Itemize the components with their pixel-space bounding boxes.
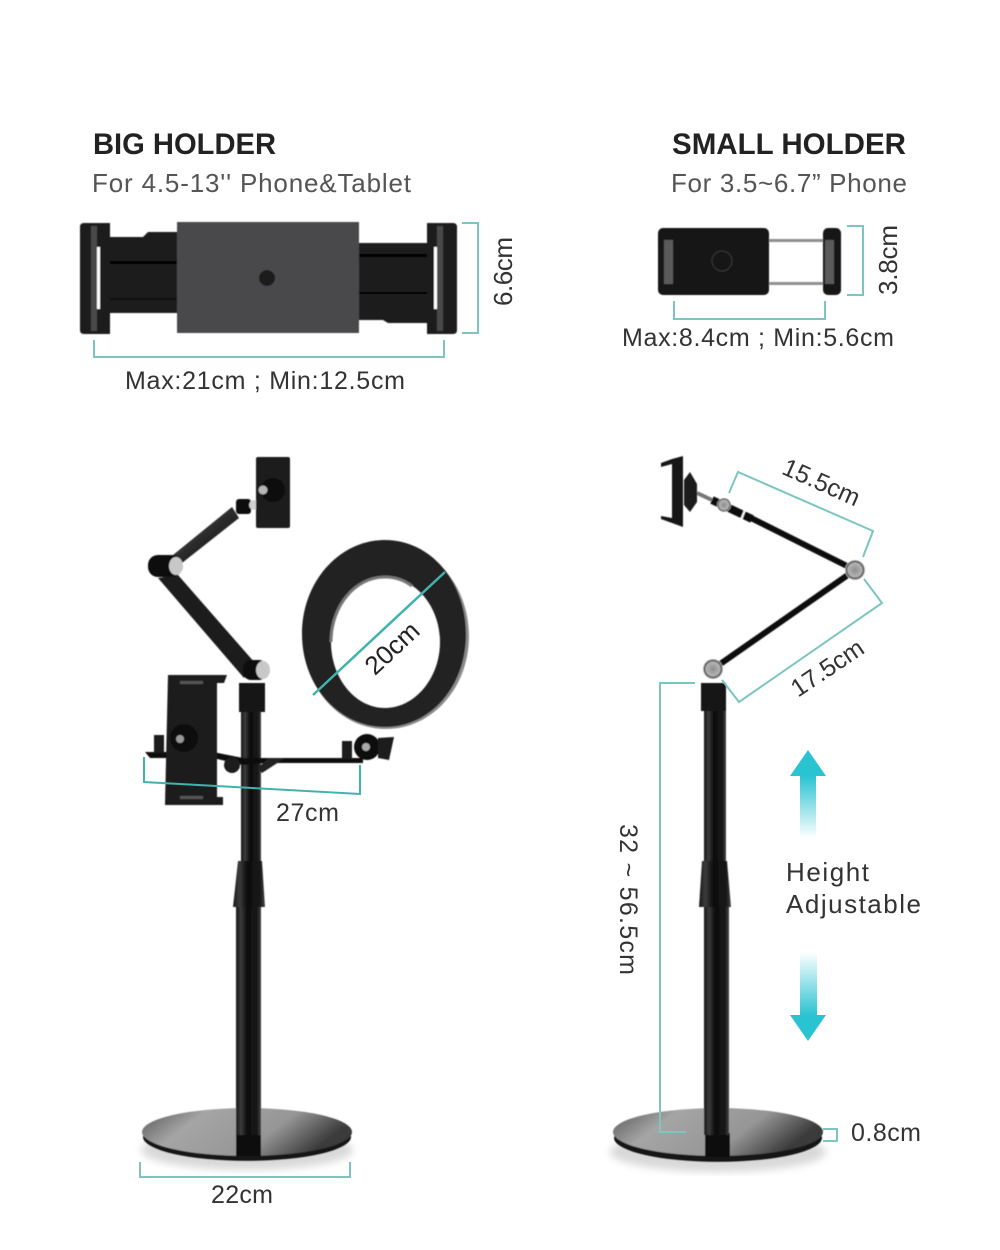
dimension: small holder height: [847, 225, 903, 295]
dimension: base diameter: [140, 1162, 350, 1209]
dimension: lower arm length: [722, 579, 882, 703]
folding arm: [697, 493, 865, 679]
dimension: upper arm length: [729, 453, 873, 557]
telescopic pole: [233, 683, 265, 1135]
telescopic pole: [699, 683, 731, 1135]
dimension: big holder height: [462, 223, 518, 333]
ring mount knob: [354, 734, 394, 760]
label: height adjustable: Height: [786, 857, 870, 887]
lower phone holder: [165, 675, 227, 805]
label: height adjustable: Adjustable: [786, 889, 921, 919]
dimension: ring diameter: 20cm: [359, 615, 425, 681]
dimension: big holder width: Max:21cm ; Min:12.5cm: [125, 367, 405, 395]
dimension: ring diameter: [313, 572, 445, 695]
folding arm: [148, 499, 270, 680]
dimension: big holder width: [94, 340, 444, 395]
dimension: small holder width: [622, 301, 894, 352]
dimension: base thickness: 0.8cm: [851, 1119, 921, 1147]
right stand photo: [610, 456, 865, 1172]
heading: big holder: BIG HOLDER: [93, 128, 276, 161]
dimension: bar width: [144, 757, 360, 827]
top phone holder: [256, 457, 290, 528]
stand base: [610, 1108, 826, 1172]
arrow: down: [790, 952, 826, 1041]
ring light: [302, 540, 469, 729]
stand base: [141, 1108, 353, 1170]
dimension: small holder height: 3.8cm: [873, 225, 903, 295]
accessory bar: [145, 735, 363, 773]
subheading: small holder size range: For 3.5~6.7” Phone: [671, 168, 907, 198]
dimension: upper arm length: 15.5cm: [778, 453, 864, 512]
dimension: big holder height: 6.6cm: [488, 237, 518, 306]
dimension: small holder width: Max:8.4cm ; Min:5.6cm: [622, 324, 894, 352]
side phone holder: [661, 456, 697, 527]
subheading: big holder size range: For 4.5-13'' Phone&Tablet: [92, 168, 412, 198]
dimension: pole height: [614, 683, 695, 1132]
dimension: base diameter: 22cm: [211, 1181, 273, 1209]
dimension: lower arm length: 17.5cm: [786, 634, 869, 703]
dimension: bar width: 27cm: [276, 799, 339, 827]
left stand photo: [141, 457, 469, 1170]
big holder photo: [80, 222, 457, 334]
arrow: up: [790, 750, 826, 838]
small holder photo: [658, 228, 841, 295]
label: height adjustable: [786, 857, 921, 919]
heading: small holder: SMALL HOLDER: [672, 128, 906, 161]
dimension: pole height: 32 ~ 56.5cm: [614, 824, 642, 975]
